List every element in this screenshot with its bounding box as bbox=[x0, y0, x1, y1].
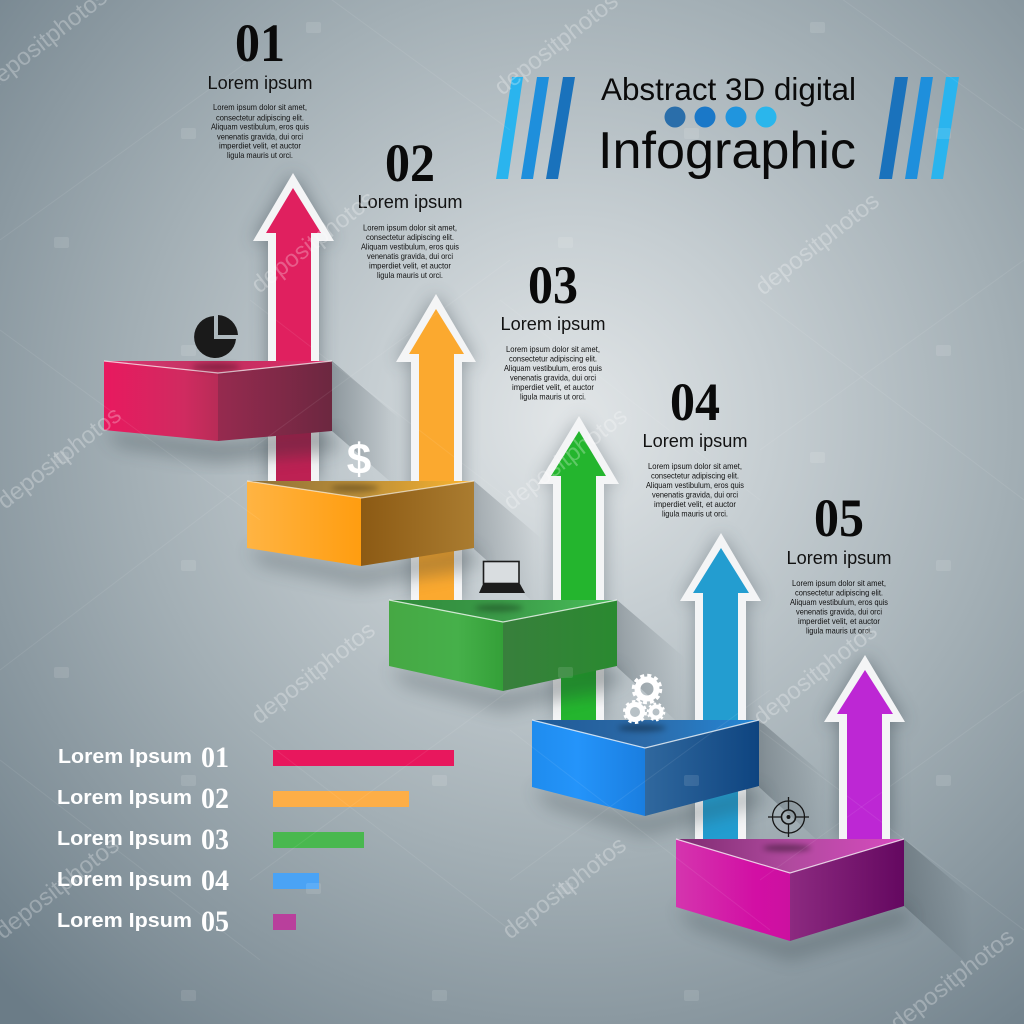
icon: gears bbox=[624, 676, 664, 722]
icon: dollar sign: $ bbox=[347, 435, 371, 484]
step 2 text: imperdiet velit, et auctor bbox=[369, 262, 451, 270]
step 5 text: consectetur adipiscing elit. bbox=[795, 588, 883, 598]
arrow 4: blue bbox=[680, 533, 761, 839]
step 4 text bbox=[642, 372, 748, 518]
step 2 text: Lorem ipsum bbox=[358, 192, 462, 212]
step 5 text: ligula mauris ut orci. bbox=[806, 626, 872, 636]
legend row 2 bbox=[57, 782, 409, 815]
step 4 text: imperdiet velit, et auctor bbox=[654, 500, 736, 509]
step 3 text: consectetur adipiscing elit. bbox=[509, 354, 597, 364]
step 1 text: Lorem ipsum bbox=[208, 73, 312, 93]
step 3 text: Lorem ipsum dolor sit amet, bbox=[506, 345, 600, 354]
icon: pie chart bbox=[194, 315, 238, 358]
title line one: Abstract 3D digital bbox=[601, 72, 856, 107]
legend row 5: 05 bbox=[201, 905, 229, 938]
watermark: depositphotos bbox=[246, 616, 381, 730]
step 4 text: venenatis gravida, dui orci bbox=[652, 490, 738, 500]
arrow 2: orange bbox=[396, 294, 476, 600]
step 1 text: Lorem ipsum dolor sit amet, bbox=[213, 103, 307, 112]
watermark: depositphotos bbox=[497, 831, 632, 945]
block 3: green bbox=[389, 600, 685, 729]
step 5 text: 05 bbox=[814, 488, 864, 548]
step 5 text bbox=[786, 488, 892, 636]
title block bbox=[496, 72, 959, 180]
step 1 text: ligula mauris ut orci. bbox=[227, 151, 293, 160]
block 1: pink bbox=[104, 361, 400, 490]
legend row 1: Lorem Ipsum bbox=[58, 746, 192, 768]
step 4 text: Lorem ipsum dolor sit amet, bbox=[648, 462, 742, 471]
step 2 text: Aliquam vestibulum, eros quis bbox=[361, 242, 459, 252]
watermark: depositphotos bbox=[498, 402, 633, 516]
legend row 4: 04 bbox=[201, 864, 229, 897]
step 2 text bbox=[358, 133, 462, 280]
icon: target bbox=[768, 797, 809, 837]
step 5 text: Lorem ipsum bbox=[786, 548, 892, 568]
legend row 3 bbox=[57, 823, 364, 856]
icon: laptop bbox=[479, 562, 525, 593]
step 1 text bbox=[208, 13, 312, 160]
step 3 text: Lorem ipsum bbox=[500, 314, 606, 334]
step 1 text: Aliquam vestibulum, eros quis bbox=[211, 122, 309, 132]
step 4 text: Aliquam vestibulum, eros quis bbox=[646, 481, 744, 490]
step 5 text: venenatis gravida, dui orci bbox=[796, 608, 882, 616]
legend row 1: 01 bbox=[201, 741, 229, 774]
legend row 2: Lorem Ipsum bbox=[57, 787, 192, 809]
step 4 text: 04 bbox=[670, 372, 720, 432]
step 4 text: ligula mauris ut orci. bbox=[662, 510, 728, 518]
block 2: orange bbox=[247, 481, 542, 610]
step 3 text: Aliquam vestibulum, eros quis bbox=[504, 364, 602, 373]
legend row 2: 02 bbox=[201, 782, 229, 815]
step 2 text: consectetur adipiscing elit. bbox=[366, 233, 454, 242]
watermark: depositphotos bbox=[750, 187, 885, 301]
block 5: purple bbox=[676, 839, 972, 968]
step 5 text: Aliquam vestibulum, eros quis bbox=[790, 598, 888, 607]
step 3 text: 03 bbox=[528, 255, 578, 315]
arrow 5: purple bbox=[824, 655, 905, 839]
step 4 text: consectetur adipiscing elit. bbox=[651, 472, 739, 480]
legend row 3: 03 bbox=[201, 823, 229, 856]
step 2 text: 02 bbox=[385, 133, 435, 193]
step 3 text: ligula mauris ut orci. bbox=[520, 392, 586, 402]
step 3 text: venenatis gravida, dui orci bbox=[510, 374, 596, 382]
step 1 text: consectetur adipiscing elit. bbox=[216, 114, 304, 122]
title line two: Infographic bbox=[598, 122, 856, 180]
left stripes bbox=[496, 77, 575, 179]
arrow 1: pink bbox=[253, 173, 334, 481]
step 1 text: 01 bbox=[235, 13, 285, 73]
step 1 text: imperdiet velit, et auctor bbox=[219, 142, 301, 150]
step 3 text bbox=[500, 255, 606, 402]
title dots bbox=[664, 106, 776, 128]
block 4: blue bbox=[532, 720, 827, 849]
arrow 3: green bbox=[538, 416, 619, 720]
step 2 text: venenatis gravida, dui orci bbox=[367, 252, 453, 261]
step 5 text: Lorem ipsum dolor sit amet, bbox=[792, 579, 886, 588]
legend row 1 bbox=[58, 741, 454, 774]
watermark: depositphotos bbox=[246, 185, 381, 299]
step 2 text: ligula mauris ut orci. bbox=[377, 271, 443, 280]
step 4 text: Lorem ipsum bbox=[642, 431, 748, 451]
right stripes bbox=[879, 77, 959, 179]
legend row 5: Lorem Ipsum bbox=[57, 910, 192, 932]
step 3 text: imperdiet velit, et auctor bbox=[512, 383, 594, 392]
watermark: depositphotos bbox=[748, 617, 883, 731]
legend row 3: Lorem Ipsum bbox=[57, 828, 192, 850]
legend row 4 bbox=[57, 864, 319, 897]
legend bar chart bbox=[57, 741, 454, 938]
step 2 text: Lorem ipsum dolor sit amet, bbox=[363, 224, 457, 232]
legend row 4: Lorem Ipsum bbox=[57, 869, 192, 891]
step 1 text: venenatis gravida, dui orci bbox=[217, 132, 303, 142]
legend row 5 bbox=[57, 905, 296, 938]
step 5 text: imperdiet velit, et auctor bbox=[798, 617, 880, 626]
